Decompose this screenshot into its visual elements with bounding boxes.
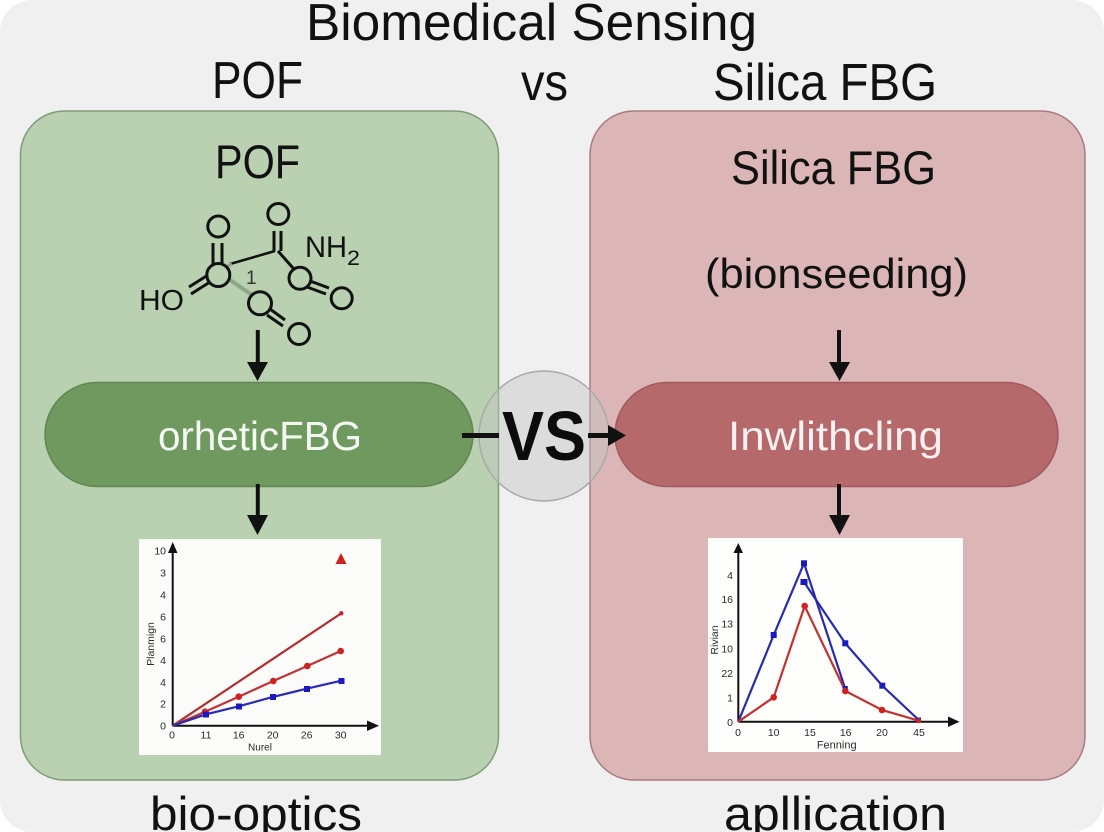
line chart: POF: 0 [160,720,166,732]
panel: POF [20,111,498,780]
line chart: Silica FBG: 15 [804,727,816,739]
pill: Inwlithcling [615,382,1058,486]
arrow: pill to chart [247,484,268,535]
pill: orheticFBG: orheticFBG [158,413,362,459]
line chart: Silica FBG: 16 [840,727,852,739]
arrow: molecule to pill [247,330,268,381]
line chart: Silica FBG: 10 [721,644,733,656]
molecule diagram: 1 [246,268,257,289]
text: bionseeding: (bionseeding) [705,250,968,297]
line chart: POF: Nurel [248,742,272,754]
subtitle: Silica FBG: Silica FBG [713,54,937,112]
line chart: POF: 4 [160,655,166,667]
arrow: label to pill [829,330,850,381]
molecule diagram: HO [139,285,184,317]
line chart: Silica FBG [708,538,963,752]
line chart: Silica FBG: 10 [768,727,780,739]
line chart: POF: 6 [160,634,166,646]
subtitle: POF: POF [212,52,303,110]
line chart: POF: 16 [233,730,245,742]
pill: Inwlithcling: Inwlithcling [728,413,943,459]
vs badge: VS [502,397,586,475]
panel heading: Silica FBG: Silica FBG [731,141,936,194]
line chart: Silica FBG: 16 [721,594,733,606]
line chart: Silica FBG: 1 [727,692,733,704]
line chart: Silica FBG: 13 [721,618,733,630]
molecule diagram: NH [305,231,347,264]
line chart: POF [139,539,381,755]
pill: orheticFBG [45,382,473,486]
panel: Silica FBG [590,111,1085,780]
line chart: Silica FBG: 20 [876,727,888,739]
line chart: POF: 6 [160,612,166,624]
line chart: POF: 4 [160,677,166,689]
line chart: Silica FBG: 0 [735,727,741,739]
line chart: POF: 26 [301,730,313,742]
line chart: POF: 3 [160,568,166,580]
subtitle: vs: vs [521,54,568,112]
line chart: POF: 10 [154,546,166,558]
line chart: POF: 11 [201,730,212,742]
arrow: right connector [588,425,626,446]
molecule diagram [139,204,360,344]
molecule diagram: 2 [347,247,360,270]
line chart: POF: 30 [335,730,347,742]
arrow: left connector [462,433,499,438]
line chart: POF: 4 [160,590,166,602]
arrow: pill to chart [829,484,850,535]
line chart: Silica FBG: 22 [721,668,733,680]
line chart: Silica FBG: Rivian [709,625,721,655]
line chart: Silica FBG: 4 [727,570,733,582]
line chart: POF: 0 [169,730,175,742]
line chart: Silica FBG: 0 [727,717,733,729]
line chart: Silica FBG: Fenning [817,740,857,752]
line chart: POF: Planmign [145,622,157,666]
line chart: POF: 20 [267,730,279,742]
panel heading: POF: POF [215,135,300,188]
line chart: POF: 2 [160,698,166,710]
line chart: Silica FBG: 45 [913,727,925,739]
vs badge [462,371,626,501]
